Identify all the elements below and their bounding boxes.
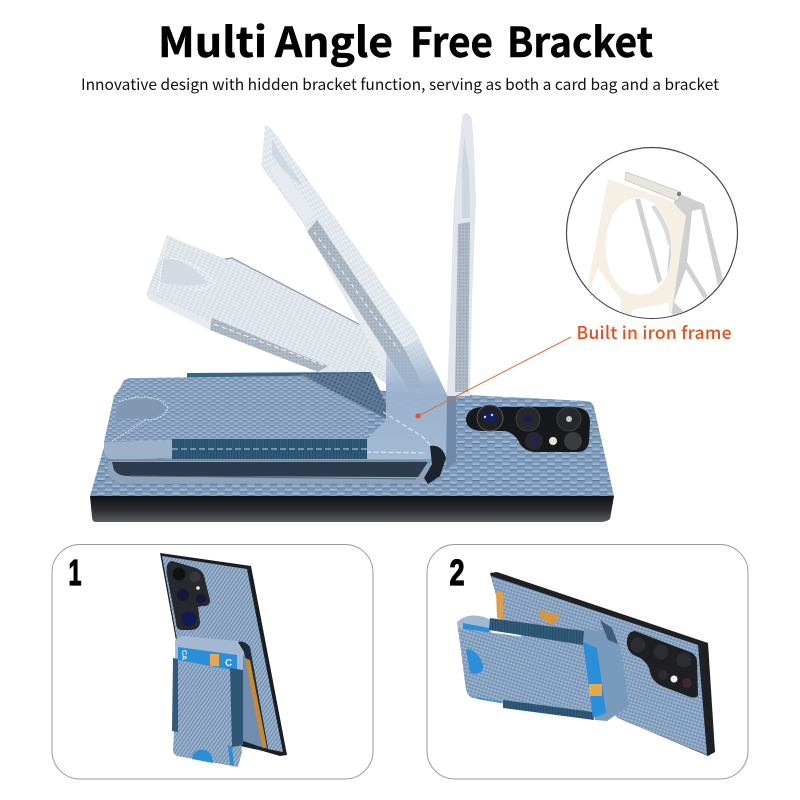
phone body black edge xyxy=(90,496,614,522)
wallet outline bottom xyxy=(106,460,426,461)
wallet hinge side xyxy=(583,630,629,721)
phone standing xyxy=(160,553,287,756)
panel 2 xyxy=(427,544,748,779)
title: Multi xyxy=(158,9,267,69)
flap 2 middle angle xyxy=(261,125,442,392)
wallet front xyxy=(458,628,594,720)
flap 3 upright xyxy=(447,113,476,396)
inset circle: iron frame xyxy=(566,148,738,330)
hinge stitching xyxy=(366,412,431,453)
camera island xyxy=(627,631,698,698)
title: Free xyxy=(410,9,493,69)
main product: phone with wallet bracket xyxy=(90,113,614,522)
camera island xyxy=(167,561,210,630)
callout leader line xyxy=(416,337,571,418)
thumb cut xyxy=(466,649,483,674)
lower wallet layer xyxy=(108,458,436,484)
blue strap xyxy=(172,439,367,459)
wallet back lip with card xyxy=(457,615,492,640)
rear pocket with orange card xyxy=(538,610,560,625)
frame leg notch xyxy=(590,268,621,312)
orange card in rear pocket xyxy=(496,592,503,620)
frame leg notch right xyxy=(630,303,670,318)
strap top xyxy=(489,618,584,645)
straps xyxy=(172,658,178,732)
title: Angle xyxy=(274,9,393,69)
dark band of bracket over wallet xyxy=(300,373,388,420)
wallet front xyxy=(104,374,368,442)
pocket side panel xyxy=(242,655,262,747)
dark pocket slot xyxy=(238,642,268,750)
grey rear struts xyxy=(635,199,662,284)
open wallet back xyxy=(175,636,246,760)
camera island xyxy=(466,405,590,452)
translucent hinge area xyxy=(366,338,452,459)
title: Bracket xyxy=(507,9,653,69)
blue card: C xyxy=(225,658,232,669)
blue card bottom slip xyxy=(228,745,234,766)
step number 2: 2 xyxy=(450,552,464,593)
blue card xyxy=(583,642,606,718)
dark foot xyxy=(240,740,268,752)
title xyxy=(158,9,653,69)
blue card xyxy=(178,647,237,672)
blue card: CA xyxy=(180,650,187,660)
thumb cut-out xyxy=(114,399,166,420)
cream frame with round opening xyxy=(585,179,686,330)
hinge xyxy=(625,172,681,201)
step number 1: 1 xyxy=(68,552,82,593)
strap top behind wallet xyxy=(187,372,372,384)
panel 1 xyxy=(52,544,373,779)
lower stitched lip xyxy=(104,440,172,460)
phone back with carbon texture xyxy=(90,378,614,496)
thumb cut xyxy=(192,750,213,763)
phone lying xyxy=(490,572,715,756)
flap 1 lowest angle xyxy=(147,235,386,384)
orange card edge xyxy=(245,658,267,748)
front wallet xyxy=(173,660,242,767)
callout label: Built in iron frame xyxy=(576,320,732,345)
strap bottom xyxy=(503,700,594,720)
subtitle: Innovative design with hidden bracket function, serving as both a card bag and a bracket xyxy=(81,73,719,95)
hinge shadow xyxy=(424,446,446,484)
